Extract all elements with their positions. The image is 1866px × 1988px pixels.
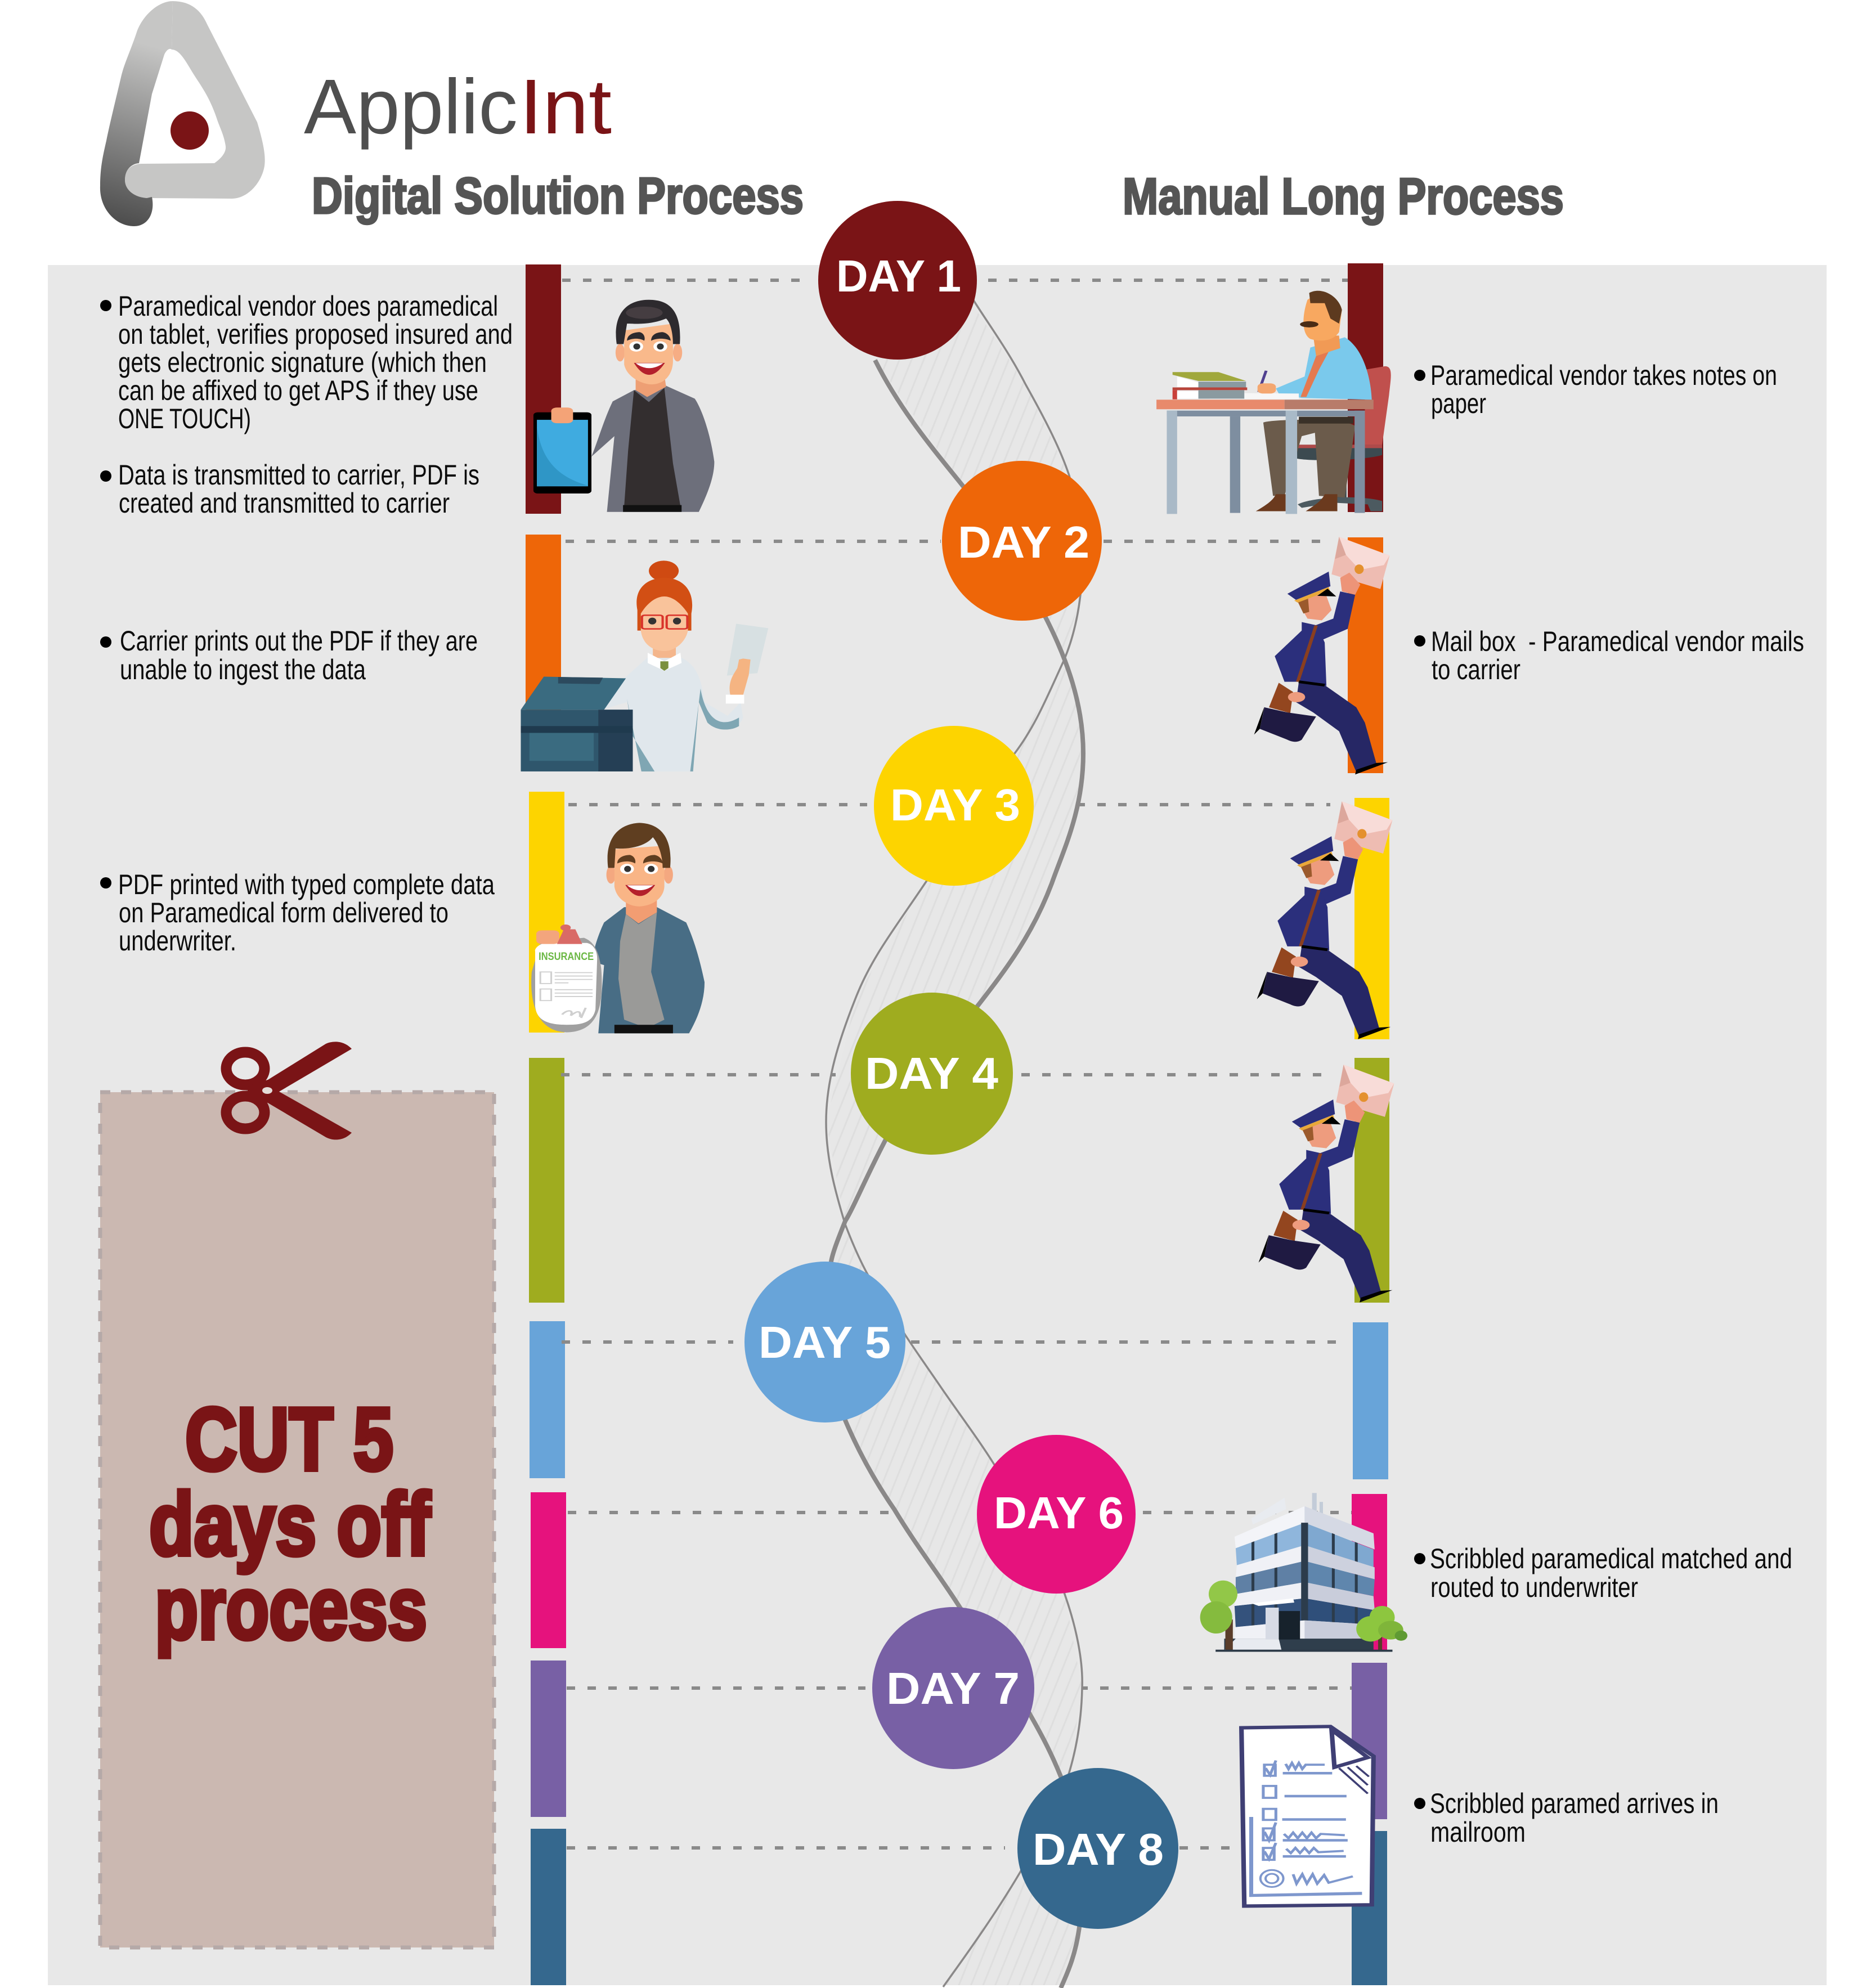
text: digital day 1 notes: on tablet, verifies proposed insured and — [118, 318, 513, 350]
panel: cut 5 days callout: process — [155, 1559, 427, 1658]
day 2 badge: DAY 2 — [958, 517, 1089, 567]
day 1 badge — [818, 201, 977, 360]
right colour bars — [1348, 263, 1389, 1985]
dashed day connector lines — [561, 280, 1352, 1848]
text: digital day 2 notes — [100, 625, 478, 685]
day 1 badge: DAY 1 — [836, 251, 961, 301]
day 6 badge — [977, 1435, 1136, 1594]
heading: Digital Solution Process: Digital Solution Process — [312, 168, 804, 225]
text: digital day 2 notes: Carrier prints out the PDF if they are — [120, 625, 478, 657]
text: manual day 7 notes: mailroom — [1430, 1816, 1526, 1848]
text: manual day 6 notes — [1414, 1543, 1792, 1603]
panel: cut 5 days callout — [100, 1092, 494, 1947]
text: digital day 3 notes: underwriter. — [119, 925, 236, 957]
text: manual day 2 notes — [1414, 626, 1804, 685]
illustration: mail carrier day 4 — [1259, 1065, 1394, 1303]
text: manual day 6 notes: Scribbled paramedical matched and — [1430, 1543, 1792, 1574]
day 8 badge: DAY 8 — [1033, 1824, 1164, 1874]
illustration: man holding tablet — [533, 300, 714, 512]
panel: cut 5 days callout: CUT 5 — [185, 1390, 393, 1489]
text: digital day 3 notes — [100, 869, 495, 957]
day 4 badge — [851, 993, 1013, 1155]
logo wordmark: ApplicInt — [304, 64, 612, 150]
left colour bars — [526, 264, 566, 1985]
illustration: man with insurance form: INSURANCE — [539, 950, 594, 962]
day 7 badge: DAY 7 — [886, 1663, 1020, 1713]
text: digital day 3 notes: PDF printed with typed complete data — [118, 869, 495, 900]
timeline wave ribbon — [826, 270, 1083, 1988]
day 6 badge: DAY 6 — [994, 1488, 1124, 1538]
text: digital day 1 notes: created and transmitted to carrier — [119, 487, 450, 519]
text: digital day 1 notes: can be affixed to get APS if they use — [118, 375, 478, 406]
day 5 badge — [744, 1262, 905, 1422]
day 8 badge — [1017, 1768, 1178, 1929]
illustration: man writing at desk — [1156, 291, 1391, 514]
icon: scissors — [226, 1042, 352, 1139]
text: digital day 1 notes: ONE TOUCH) — [118, 403, 251, 434]
logo wordmark: ApplicInt: Applic — [304, 64, 518, 150]
logo: ApplicInt mark — [100, 1, 265, 226]
text: manual day 7 notes — [1414, 1788, 1719, 1848]
day 3 badge: DAY 3 — [890, 780, 1020, 830]
text: manual day 7 notes: Scribbled paramed arrives in — [1430, 1788, 1719, 1819]
day 3 badge — [874, 726, 1034, 886]
text: digital day 1 notes: Data is transmitted to carrier, PDF is — [118, 459, 479, 491]
day 2 badge — [942, 461, 1102, 621]
text: manual day 1 notes — [1414, 360, 1777, 419]
text: digital day 1 notes — [100, 290, 513, 519]
illustration: mail carrier day 2 — [1254, 537, 1389, 774]
illustration: office building — [1200, 1493, 1407, 1652]
illustration: scribbled paper form — [1241, 1726, 1374, 1906]
day 4 badge: DAY 4 — [865, 1048, 999, 1098]
panel: cut 5 days callout: days off — [149, 1475, 430, 1574]
illustration: man with insurance form — [531, 823, 705, 1033]
day 7 badge — [872, 1607, 1034, 1769]
heading: Manual Long Process: Manual Long Process — [1123, 168, 1564, 225]
text: digital day 3 notes: on Paramedical form delivered to — [119, 897, 448, 928]
text: manual day 6 notes: routed to underwriter — [1430, 1572, 1638, 1603]
text: digital day 1 notes: Paramedical vendor does paramedical — [118, 290, 498, 322]
text: digital day 2 notes: unable to ingest the data — [120, 654, 366, 685]
illustration: mail carrier day 3 — [1257, 801, 1392, 1039]
text: manual day 1 notes: paper — [1431, 388, 1486, 419]
day 5 badge: DAY 5 — [759, 1317, 891, 1367]
illustration: woman at printer — [521, 560, 768, 771]
logo wordmark: ApplicInt: Int — [519, 64, 612, 150]
text: manual day 1 notes: Paramedical vendor takes notes on — [1430, 360, 1777, 391]
text: manual day 2 notes: to carrier — [1432, 654, 1520, 685]
text: digital day 1 notes: gets electronic signature (which then — [118, 347, 487, 378]
